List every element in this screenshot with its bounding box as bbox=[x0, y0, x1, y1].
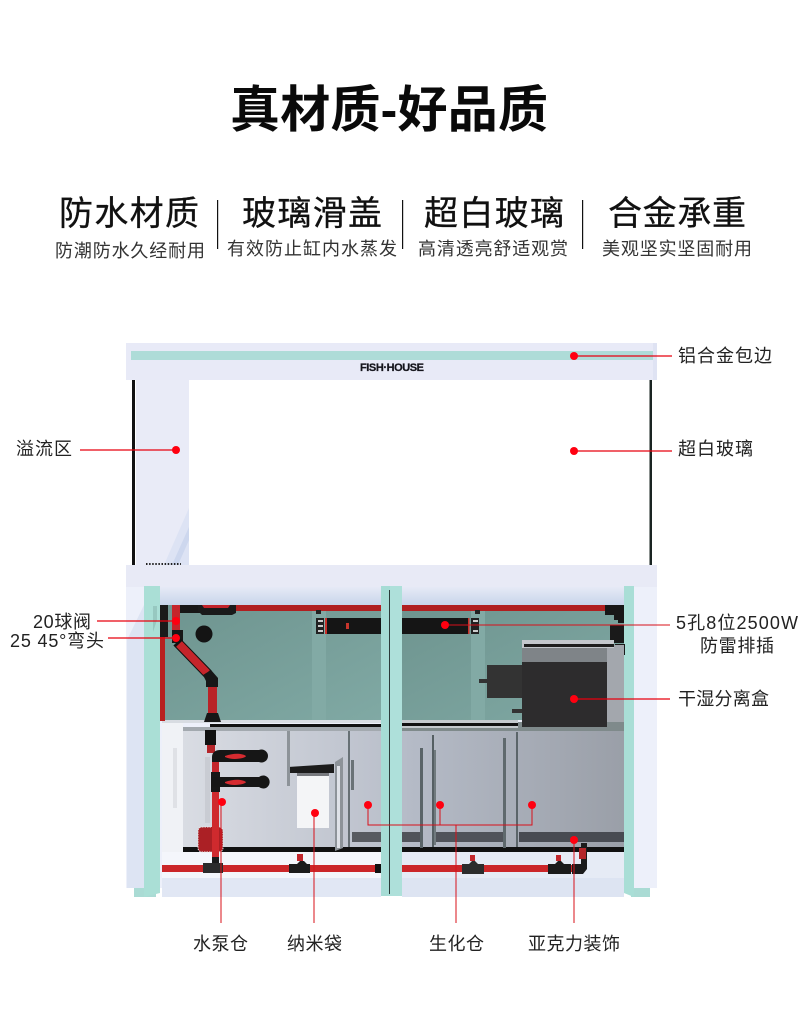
callout: 干湿分离盒 bbox=[570, 689, 769, 709]
top red pipe bbox=[160, 605, 625, 655]
bottom red pipe bbox=[162, 843, 587, 874]
callout: 生化仓: 生化仓 bbox=[429, 934, 484, 954]
feature: 玻璃滑盖: 有效防止缸内水蒸发 bbox=[227, 238, 397, 259]
left elbow pipe run bbox=[172, 605, 221, 722]
feature: 玻璃滑盖 bbox=[227, 195, 397, 259]
inner left bay bbox=[160, 587, 381, 897]
title: 真材质-好品质 bbox=[230, 82, 548, 138]
callout: 超白玻璃 bbox=[570, 439, 753, 459]
callout: 防雷排插 bbox=[441, 613, 798, 656]
callout: 超白玻璃: 超白玻璃 bbox=[678, 439, 753, 459]
feature: 防水材质 bbox=[55, 195, 205, 261]
callout: 25 45°弯头 bbox=[10, 631, 180, 651]
feature: 防水材质: 防水材质 bbox=[59, 195, 199, 233]
callout: 亚克力装饰 bbox=[528, 836, 620, 954]
callout: 25 45°弯头: 25 45°弯头 bbox=[10, 631, 104, 651]
callout: 水泵仓 bbox=[193, 798, 248, 954]
brand logo: FISH·HOUSE bbox=[360, 362, 424, 374]
pump vertical pipe bbox=[173, 730, 270, 873]
cabinet bbox=[126, 586, 657, 897]
callout: 生化仓 bbox=[364, 801, 536, 954]
callout: 溢流区 bbox=[16, 439, 180, 459]
callout: 20球阀 bbox=[33, 612, 180, 632]
callout: 铝合金包边: 铝合金包边 bbox=[678, 346, 772, 366]
callout: 溢流区: 溢流区 bbox=[16, 439, 72, 459]
nano bag bbox=[287, 731, 354, 851]
tank base band bbox=[126, 565, 657, 587]
callout: 纳米袋: 纳米袋 bbox=[287, 934, 342, 954]
teal frame posts bbox=[144, 586, 634, 897]
feature: 合金承重: 合金承重 bbox=[608, 195, 746, 233]
feature: 合金承重: 美观坚实坚固耐用 bbox=[602, 239, 752, 259]
ball valve upper bbox=[212, 750, 268, 763]
aquarium diagram bbox=[126, 343, 657, 897]
callout: 20球阀: 20球阀 bbox=[33, 612, 91, 632]
scale marks bbox=[173, 748, 177, 808]
callout: 亚克力装饰: 亚克力装饰 bbox=[528, 934, 620, 954]
top hood with aluminium strip bbox=[126, 343, 657, 380]
pump bbox=[198, 827, 223, 852]
bio chamber racks bbox=[352, 732, 624, 848]
callout: 纳米袋 bbox=[287, 809, 342, 954]
feature: 超白玻璃 bbox=[418, 195, 568, 259]
feature: 超白玻璃: 高清透亮舒适观赏 bbox=[418, 239, 568, 259]
feature: 防水材质: 防潮防水久经耐用 bbox=[55, 241, 205, 261]
feature: 超白玻璃: 超白玻璃 bbox=[424, 195, 564, 233]
callout: 铝合金包边 bbox=[570, 346, 772, 366]
feature: 合金承重 bbox=[602, 195, 752, 259]
callout: 干湿分离盒: 干湿分离盒 bbox=[678, 689, 769, 709]
tee fittings bbox=[289, 861, 310, 873]
feature: 玻璃滑盖: 玻璃滑盖 bbox=[242, 195, 382, 233]
callout: 水泵仓: 水泵仓 bbox=[193, 934, 248, 954]
wet-dry separator box bbox=[479, 640, 624, 727]
power strip bbox=[316, 610, 480, 634]
glass tank bbox=[132, 380, 652, 565]
overflow column bbox=[136, 380, 189, 565]
callout: 防雷排插: 5孔8位2500W bbox=[676, 613, 798, 633]
feature row bbox=[55, 195, 752, 261]
callout: 防雷排插: 防雷排插 bbox=[700, 636, 774, 656]
cabinet outer bbox=[126, 587, 657, 888]
inner right bay bbox=[402, 587, 624, 897]
black drain fitting bbox=[196, 626, 212, 642]
ball valve lower bbox=[212, 776, 270, 788]
